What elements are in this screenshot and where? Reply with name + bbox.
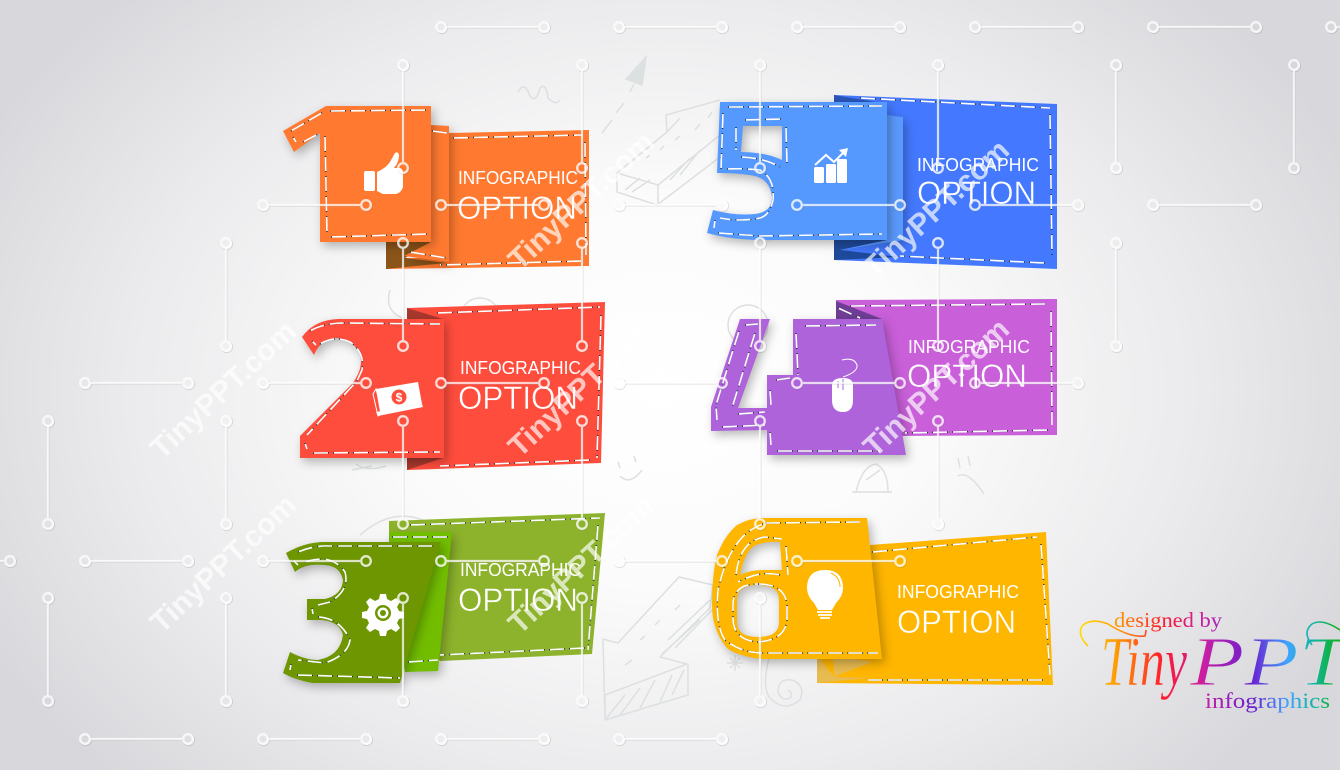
stitches <box>714 98 1052 263</box>
icon: thumbs up <box>364 152 403 194</box>
stitches <box>290 518 600 678</box>
dark fold <box>386 240 446 269</box>
watermarks: TinyPPT.com <box>502 126 661 277</box>
watermarks: TinyPPT.com <box>857 313 1016 464</box>
ribbon back <box>386 130 589 269</box>
doodle: arrow head <box>626 57 646 85</box>
middle fold <box>840 115 903 250</box>
numeral 1 front <box>283 106 431 242</box>
light folds <box>817 655 870 683</box>
middle fold <box>404 125 449 262</box>
panel 2: red option <box>300 302 605 470</box>
icon: banknotes <box>373 382 423 416</box>
option label: OPTION <box>457 190 577 226</box>
stitches <box>291 110 586 265</box>
option text: INFOGRAPHIC <box>458 168 578 188</box>
numeral 6 front <box>712 518 882 659</box>
numeral 2 front <box>300 319 444 458</box>
bright fold <box>389 532 452 672</box>
doodle: star <box>727 655 743 671</box>
panel 6: yellow option <box>712 518 1053 685</box>
option text: INFOGRAPHIC <box>460 358 581 378</box>
option label: OPTION <box>907 358 1027 394</box>
icon: computer mouse <box>832 359 857 412</box>
panel 1: orange option <box>283 106 589 269</box>
ribbon back <box>817 532 1053 685</box>
background doodles <box>352 57 984 720</box>
option text: INFOGRAPHIC <box>917 155 1039 175</box>
option label: OPTION <box>917 175 1036 211</box>
icon: gear <box>362 594 404 636</box>
icon: banknotes: $ <box>396 390 403 404</box>
logo: designed by TinyPPT infographics: designed by <box>1114 608 1223 632</box>
doodle: 3D arrow down <box>603 577 713 720</box>
logo: designed by TinyPPT infographics: infographics <box>1205 688 1330 713</box>
ribbon back <box>834 95 1057 269</box>
doodle: 3D arrow up <box>617 100 720 205</box>
watermarks: TinyPPT.com <box>502 313 661 464</box>
numeral 5 front <box>707 102 887 240</box>
watermarks: TinyPPT.com <box>144 315 303 466</box>
stitches <box>716 304 1052 451</box>
dark folds <box>407 308 443 319</box>
panel 5: blue option <box>707 95 1057 269</box>
option text: INFOGRAPHIC <box>908 337 1030 357</box>
numeral 3 front <box>283 542 441 683</box>
stitches <box>305 307 601 466</box>
dark folds <box>834 95 903 150</box>
doodle: dashed arrow up <box>602 84 634 133</box>
option text: INFOGRAPHIC <box>460 560 581 580</box>
option text: INFOGRAPHIC <box>897 582 1019 602</box>
watermarks: TinyPPT.com <box>144 489 303 640</box>
dark fold <box>836 301 882 319</box>
logo: designed by TinyPPT infographics <box>1080 608 1340 713</box>
logo: designed by TinyPPT infographics: Tiny <box>1101 624 1188 701</box>
ribbon back <box>407 302 605 470</box>
watermarks: TinyPPT.com <box>857 134 1016 285</box>
option label: OPTION <box>897 604 1016 640</box>
icon: light bulb <box>807 570 843 618</box>
icon: rising chart <box>814 148 848 183</box>
option label: OPTION <box>458 380 578 416</box>
ribbon back <box>389 513 605 661</box>
ribbon back <box>836 299 1057 436</box>
panel 4: purple option <box>711 299 1057 455</box>
numeral 4 front <box>711 319 906 455</box>
watermarks <box>144 126 1016 641</box>
option label: OPTION <box>458 582 578 618</box>
panel 3: green option <box>283 513 605 683</box>
watermarks: TinyPPT.com <box>502 490 661 641</box>
stitches <box>717 522 1050 680</box>
doodle: swirl <box>765 655 802 706</box>
logo: designed by TinyPPT infographics: PPT <box>1189 624 1340 701</box>
